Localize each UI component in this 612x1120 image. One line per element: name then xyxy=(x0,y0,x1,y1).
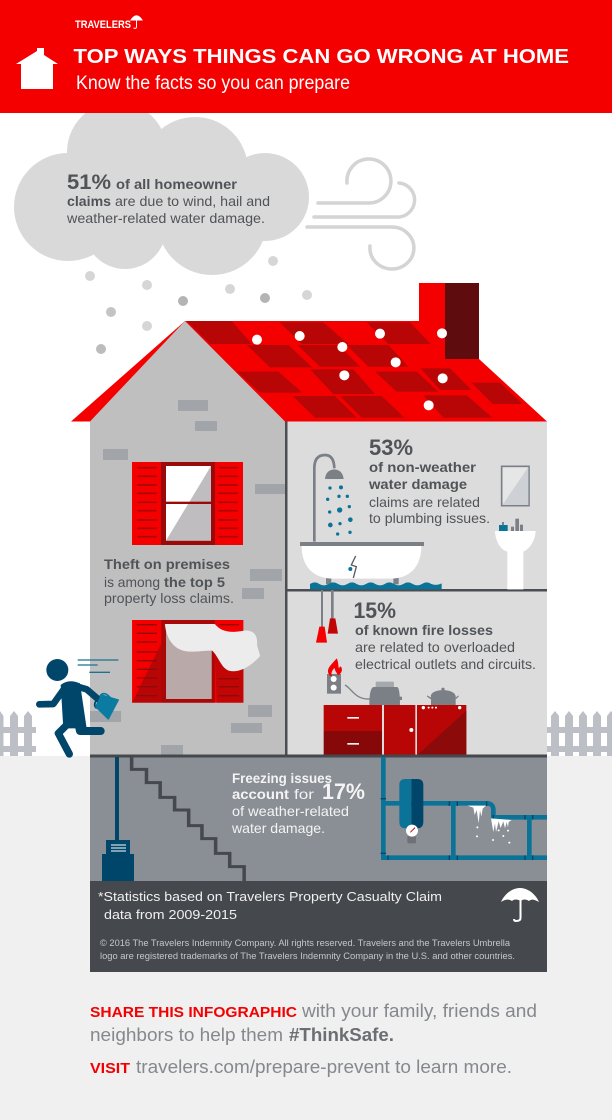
cloud statistic text xyxy=(66,171,270,226)
hail dots xyxy=(85,256,312,354)
icon: house xyxy=(16,48,58,89)
freezing statistic text: water damage. xyxy=(231,820,325,836)
wall bricks xyxy=(90,400,285,756)
call to action: VISIT xyxy=(90,1061,130,1077)
theft text: the top 5 xyxy=(164,574,225,590)
plumbing statistic text: to plumbing issues. xyxy=(369,510,490,526)
floor water xyxy=(310,582,442,589)
left wall xyxy=(90,321,285,756)
roof xyxy=(71,321,547,422)
panel: footnote: data from 2009-2015 xyxy=(104,907,237,922)
house xyxy=(71,283,547,756)
broken window with curtain xyxy=(132,620,260,703)
fence left xyxy=(0,711,36,756)
fence right xyxy=(547,711,612,756)
logo: Travelers: TRAVELERS xyxy=(75,19,131,31)
freezing statistic text xyxy=(231,770,365,836)
call to action xyxy=(90,1001,537,1077)
bathroom illustration xyxy=(300,455,536,589)
plumbing statistic text xyxy=(368,435,490,526)
freezing statistic text: 17% xyxy=(322,779,365,804)
cloud statistic text: 51% xyxy=(67,171,111,194)
fire statistic text: 15% xyxy=(354,598,396,623)
leaking pipes and kitchen xyxy=(316,590,466,755)
fire statistic text xyxy=(354,598,536,672)
freezing statistic text: for xyxy=(294,786,314,802)
panel: weather cloud xyxy=(14,102,415,354)
stairs xyxy=(132,757,244,881)
freezing statistic text: of weather-related xyxy=(232,803,349,819)
panel: basement xyxy=(90,754,547,881)
shower xyxy=(314,455,334,542)
call to action: #ThinkSafe. xyxy=(289,1025,394,1045)
cord xyxy=(345,685,370,699)
theft text: is among xyxy=(104,574,160,590)
icicles xyxy=(467,806,512,844)
icon: outlet on fire xyxy=(327,658,342,694)
fire statistic text: electrical outlets and circuits. xyxy=(355,656,536,672)
right upper room xyxy=(285,422,547,590)
plumbing statistic text: 53% xyxy=(369,435,413,460)
copyright text xyxy=(100,938,515,961)
kitchen cabinets xyxy=(324,705,466,755)
water heater xyxy=(399,779,423,843)
subtitle: Know the facts so you can prepare xyxy=(76,73,350,94)
plumbing statistic text: water damage xyxy=(368,476,467,492)
fire statistic text: are related to overloaded xyxy=(355,639,515,655)
burglar figure xyxy=(39,659,118,754)
freezing statistic text: Freezing issues xyxy=(232,770,332,786)
theft text: Theft on premises xyxy=(104,556,230,572)
mirror xyxy=(502,466,529,506)
header banner xyxy=(0,0,612,113)
toaster xyxy=(369,682,402,705)
copyright text: logo are registered trademarks of The Travelers Indemnity Company in the U.S. and other countries. xyxy=(100,951,515,961)
chimney xyxy=(419,283,479,359)
copyright text: © 2016 The Travelers Indemnity Company. All rights reserved. Travelers and the Travelers Umbrella xyxy=(100,938,510,948)
plumbing statistic text: of non-weather xyxy=(369,459,477,475)
fire statistic text: of known fire losses xyxy=(355,622,493,638)
icon: umbrella xyxy=(501,888,539,921)
leaking pipes xyxy=(316,590,338,643)
pot xyxy=(427,688,459,705)
cloud shape xyxy=(14,102,309,275)
panel: footnote xyxy=(90,881,547,972)
frozen pipes and water heater xyxy=(381,757,547,860)
call to action: travelers.com/prepare-prevent to learn more. xyxy=(136,1057,512,1077)
cloud statistic text: of all homeowner xyxy=(116,176,238,192)
bathtub xyxy=(326,578,331,584)
call to action: SHARE THIS INFOGRAPHIC xyxy=(90,1005,298,1021)
cloud statistic text: claims xyxy=(67,193,111,209)
call to action: neighbors to help them xyxy=(90,1025,283,1045)
water drops xyxy=(326,485,353,536)
roof tiles xyxy=(187,321,523,418)
plumbing statistic text: claims are related xyxy=(369,494,480,510)
utility meter xyxy=(102,757,134,881)
freezing statistic text: account xyxy=(232,786,289,802)
cloud statistic text: are due to wind, hail and xyxy=(115,193,270,209)
curtain xyxy=(165,624,260,671)
theft text: property loss claims. xyxy=(104,590,234,606)
upper window xyxy=(132,462,243,545)
right middle room xyxy=(285,590,547,756)
call to action: with your family, friends and xyxy=(301,1001,537,1021)
theft text xyxy=(104,556,234,606)
cloud statistic text: weather-related water damage. xyxy=(66,210,265,226)
footnote text: *Statistics based on Travelers Property Casualty Claim xyxy=(98,889,442,904)
icon: wind xyxy=(307,159,415,269)
room dividers xyxy=(285,422,547,756)
sink xyxy=(495,531,536,589)
title: TOP WAYS THINGS CAN GO WRONG AT HOME xyxy=(74,46,569,68)
